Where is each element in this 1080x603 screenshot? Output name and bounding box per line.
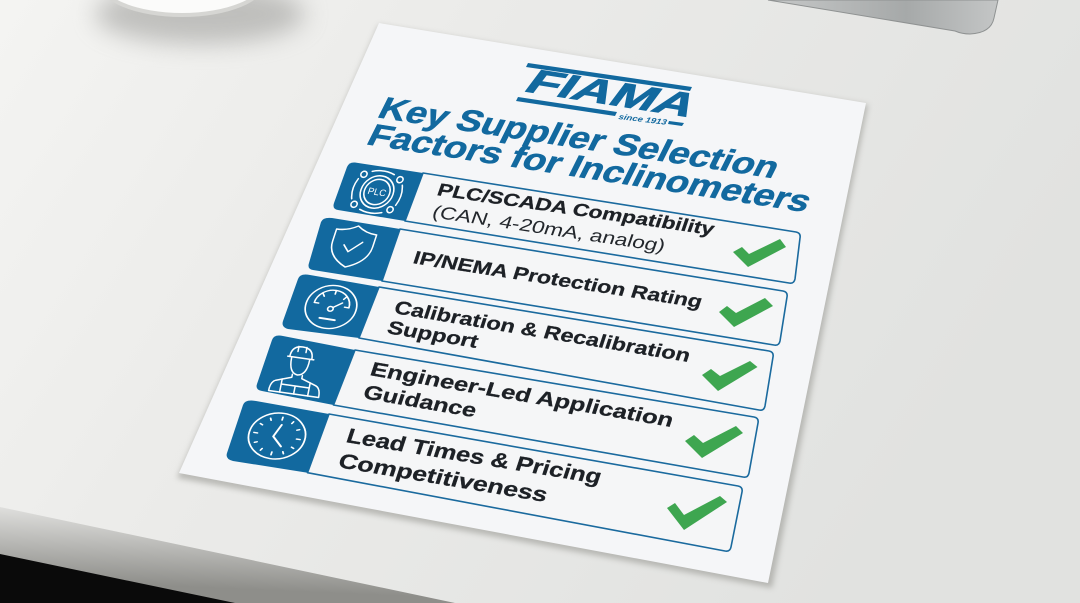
icon: gauge — [299, 282, 363, 332]
row 4: engineer-led: Engineer-Led Application — [367, 359, 676, 432]
row 1: PLC/SCADA compatibility — [334, 162, 800, 283]
icon: clock — [242, 409, 312, 463]
row 5: lead times: Lead Times & Pricing — [343, 425, 605, 489]
icon: engineer — [269, 344, 328, 398]
row 4: engineer-led — [257, 336, 758, 477]
paper sheet — [179, 23, 866, 583]
title: Factors for Inclinometers — [362, 118, 818, 219]
row 3: calibration: Calibration & Recalibration — [392, 297, 693, 366]
check — [719, 298, 773, 327]
row 5: lead times: Competitiveness — [335, 450, 551, 507]
monitor stand — [768, 0, 998, 34]
check — [667, 496, 727, 530]
icon: PLC: PLC — [366, 186, 388, 198]
icon: shield — [325, 223, 379, 270]
coffee cup saucer — [95, 0, 305, 44]
row 3: calibration: Support — [385, 317, 481, 352]
row 4: engineer-led: Guidance — [360, 382, 480, 422]
check — [685, 426, 743, 458]
row 5: lead times — [227, 400, 742, 551]
logo: FIAMA: FIAMA — [517, 64, 707, 124]
check — [733, 239, 786, 267]
desk front edge — [0, 507, 455, 603]
row 1: PLC/SCADA compatibility: PLC/SCADA Compatibility — [435, 180, 718, 239]
row 2: IP/NEMA protection — [308, 218, 787, 345]
icon: PLC — [346, 167, 408, 217]
title — [362, 91, 818, 219]
logo: FIAMA — [516, 63, 707, 127]
check — [702, 361, 758, 391]
logo: FIAMA: since 1913 — [617, 112, 669, 127]
paper shadow — [177, 25, 868, 588]
row 2: IP/NEMA protection: IP/NEMA Protection Rating — [411, 248, 705, 312]
title: Key Supplier Selection — [373, 91, 786, 185]
row 1: PLC/SCADA compatibility: (CAN, 4-20mA, analog) — [430, 202, 668, 256]
row 3: calibration — [283, 274, 773, 410]
